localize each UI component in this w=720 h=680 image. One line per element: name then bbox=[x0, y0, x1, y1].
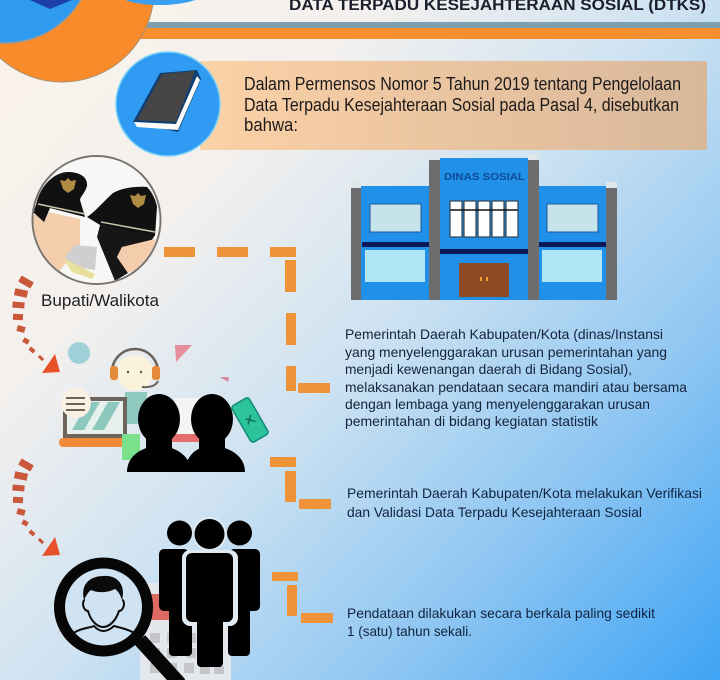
text block: local government: dengan lembaga yang menyelenggarakan urusan bbox=[345, 396, 650, 412]
arrow: officials to data entry bbox=[12, 275, 60, 373]
icon: book bbox=[116, 52, 220, 156]
text block: local government: menjadi kewenangan daerah di Bidang Sosial), bbox=[345, 361, 632, 377]
text block: yearly data collection: Pendataan dilakukan secara berkala paling sedikit bbox=[347, 605, 655, 621]
header bars bbox=[136, 22, 720, 39]
label: Bupati/Walikota: Bupati/Walikota bbox=[41, 291, 160, 310]
text block: local government: pemerintahan di bidang kegiatan statistik bbox=[345, 413, 599, 429]
icon: group of people bbox=[159, 517, 260, 667]
arrow: data entry to verification bbox=[12, 458, 60, 556]
text block: local government: Pemerintah Daerah Kabupaten/Kota (dinas/Instansi bbox=[345, 326, 663, 342]
text block: local government: yang menyelenggarakan urusan pemerintahan yang bbox=[345, 344, 667, 360]
text block: yearly data collection: 1 (satu) tahun sekali. bbox=[347, 623, 472, 639]
icon: officials portrait bbox=[28, 156, 160, 286]
text block: verification: dan Validasi Data Terpadu Kesejahteraan Sosial bbox=[347, 504, 642, 520]
logo circles bbox=[0, 0, 207, 82]
label: DINAS SOSIAL: DINAS SOSIAL bbox=[444, 172, 525, 183]
icon: calendar bbox=[140, 583, 231, 680]
text block: verification: Pemerintah Daerah Kabupaten/Kota melakukan Verifikasi bbox=[347, 485, 702, 501]
dashed connector 1 bbox=[164, 247, 330, 393]
intro text: Data Terpadu Kesejahteraan Sosial pada Pasal 4, disebutkan bbox=[244, 95, 679, 115]
intro text: bahwa: bbox=[244, 115, 298, 135]
dashed connector 2 bbox=[270, 457, 331, 509]
text block: local government: melaksanakan pendataan secara mandiri atau bersama bbox=[345, 379, 687, 395]
dashed connector 3 bbox=[272, 572, 333, 623]
icon: building Dinas Sosial bbox=[351, 154, 617, 300]
icon: magnifier with person bbox=[60, 563, 180, 680]
panel: intro text bbox=[200, 61, 707, 150]
illustration: data entry with silhouettes bbox=[59, 342, 269, 472]
